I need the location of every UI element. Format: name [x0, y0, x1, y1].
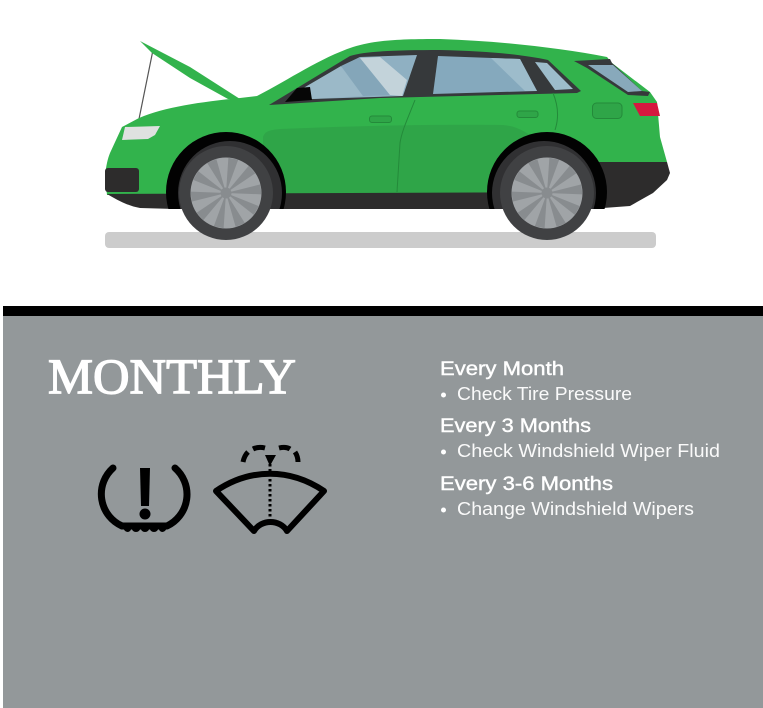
- lower trim: [107, 192, 590, 209]
- icon: windshield washer: [216, 447, 324, 531]
- side window frame: [269, 50, 581, 105]
- rear window glass: [433, 56, 537, 94]
- back window glass: [588, 65, 642, 92]
- rear wheel arch: [487, 132, 607, 209]
- fuel door: [592, 103, 622, 118]
- quarter window glass: [535, 62, 573, 90]
- text: every month: Every Month: [440, 358, 564, 380]
- front bumper vent: [105, 168, 139, 192]
- illustration: green car with open hood: [105, 39, 670, 252]
- text: every 3 months: Every 3 Months: [440, 415, 591, 437]
- open hood: [140, 41, 240, 99]
- hood prop rod: [139, 50, 153, 119]
- door seams: [397, 93, 557, 192]
- side mirror: [285, 87, 312, 102]
- heading: MONTHLY: MONTHLY: [48, 348, 296, 404]
- front window reflections: [300, 66, 363, 99]
- schedule list: Check Tire Pressure: [457, 384, 632, 404]
- car body: [105, 39, 667, 195]
- text: every 3-6 months: Every 3-6 Months: [440, 473, 613, 495]
- schedule list: Change Windshield Wipers: [457, 499, 694, 519]
- door handles: [370, 116, 392, 122]
- back window frame: [574, 59, 650, 96]
- front wheel arch: [166, 132, 286, 209]
- ground shadow: [105, 232, 656, 248]
- schedule list: [440, 358, 720, 519]
- icon: tire pressure warning: [101, 468, 187, 532]
- tail light: [633, 103, 660, 116]
- rear wheel: [500, 146, 594, 240]
- front wheel: [179, 146, 273, 240]
- front window glass: [300, 55, 417, 99]
- schedule list: Check Windshield Wiper Fluid: [457, 441, 720, 461]
- panel: monthly maintenance: [3, 306, 763, 708]
- headlight: [122, 126, 160, 140]
- lower body shading: [263, 125, 530, 194]
